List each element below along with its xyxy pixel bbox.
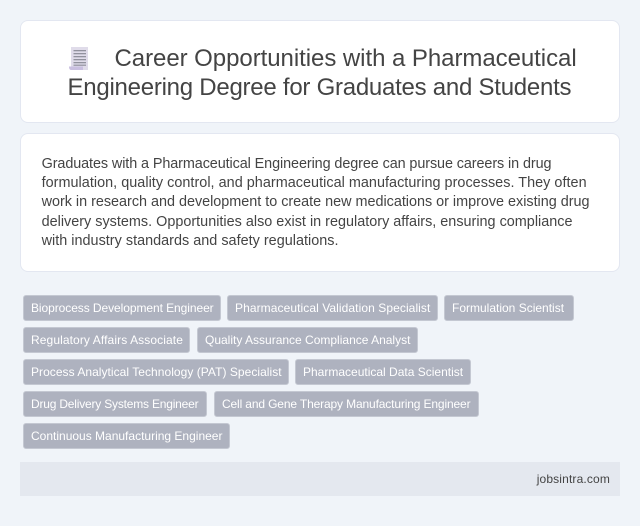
title <box>68 45 577 101</box>
tag <box>23 423 230 449</box>
tag: Bioprocess Development Engineer <box>31 301 214 315</box>
icon: scroll document <box>69 47 88 70</box>
title: Engineering Degree for Graduates and Students <box>68 74 571 101</box>
footer text: jobsintra.com <box>537 472 610 486</box>
tag: Regulatory Affairs Associate <box>31 333 183 347</box>
text block: description: Graduates with a Pharmaceutical Engineering degree can pursue careers in drug <box>42 156 551 172</box>
tag: Quality Assurance Compliance Analyst <box>205 333 410 347</box>
text block: description <box>42 156 590 249</box>
panel: description <box>20 133 620 272</box>
panel: career tags <box>23 295 574 449</box>
text block: description: delivery systems. Opportunities also exist in regulatory affairs, ensuring compliance <box>42 214 572 230</box>
tag: Process Analytical Technology (PAT) Specialist <box>31 365 282 379</box>
tag <box>23 359 289 385</box>
tag: Cell and Gene Therapy Manufacturing Engineer <box>222 397 470 411</box>
tag <box>214 391 479 417</box>
tag <box>444 295 574 321</box>
tag <box>197 327 418 353</box>
tag <box>227 295 438 321</box>
text block: description: formulation, quality control, and pharmaceutical manufacturing processes. They often <box>42 175 587 191</box>
tag: Drug Delivery Systems Engineer <box>31 397 198 411</box>
panel: title card <box>20 20 620 123</box>
text block: description: with industry standards and safety regulations. <box>42 233 339 249</box>
footer bar <box>20 462 620 496</box>
tag <box>23 391 207 417</box>
text block: description: work in research and development to create new medications or improve existing drug <box>42 194 590 210</box>
tag <box>23 327 190 353</box>
title: Career Opportunities with a Pharmaceutical <box>114 45 577 72</box>
tag: Pharmaceutical Data Scientist <box>303 365 463 379</box>
tag: Pharmaceutical Validation Specialist <box>235 301 430 315</box>
tag: Continuous Manufacturing Engineer <box>31 429 222 443</box>
tag <box>295 359 471 385</box>
tag: Formulation Scientist <box>452 301 564 315</box>
tag <box>23 295 221 321</box>
